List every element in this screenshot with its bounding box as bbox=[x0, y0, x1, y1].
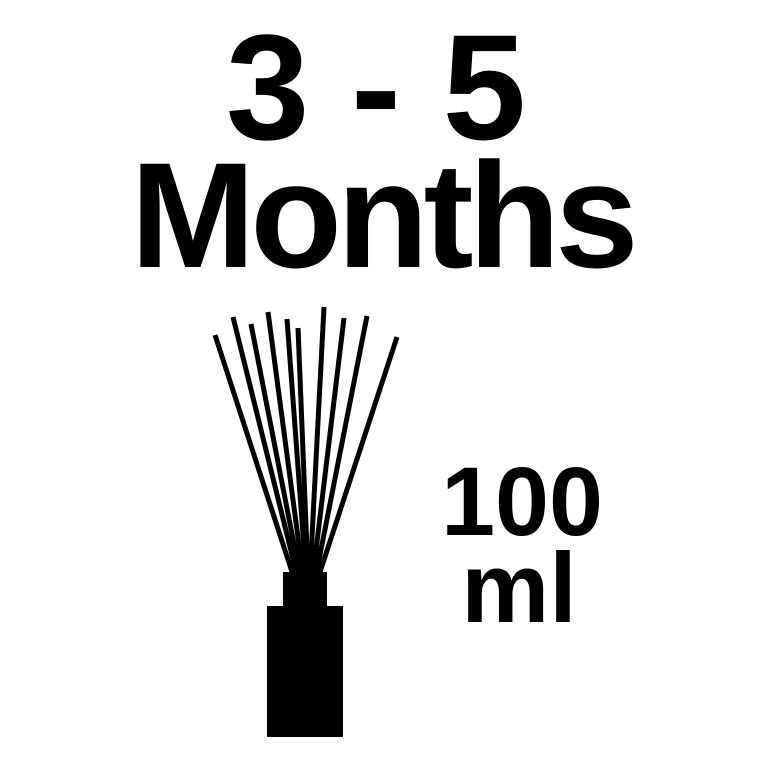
title: duration bbox=[130, 3, 634, 299]
icon: reed diffuser bbox=[215, 307, 397, 737]
title: duration: Months bbox=[130, 131, 634, 299]
volume label: ml bbox=[461, 532, 577, 643]
title: duration: 3 - 5 bbox=[226, 3, 526, 171]
volume label bbox=[441, 447, 603, 643]
bottle bbox=[267, 572, 343, 737]
reed sticks bbox=[215, 307, 397, 575]
volume label: 100 bbox=[441, 447, 603, 556]
